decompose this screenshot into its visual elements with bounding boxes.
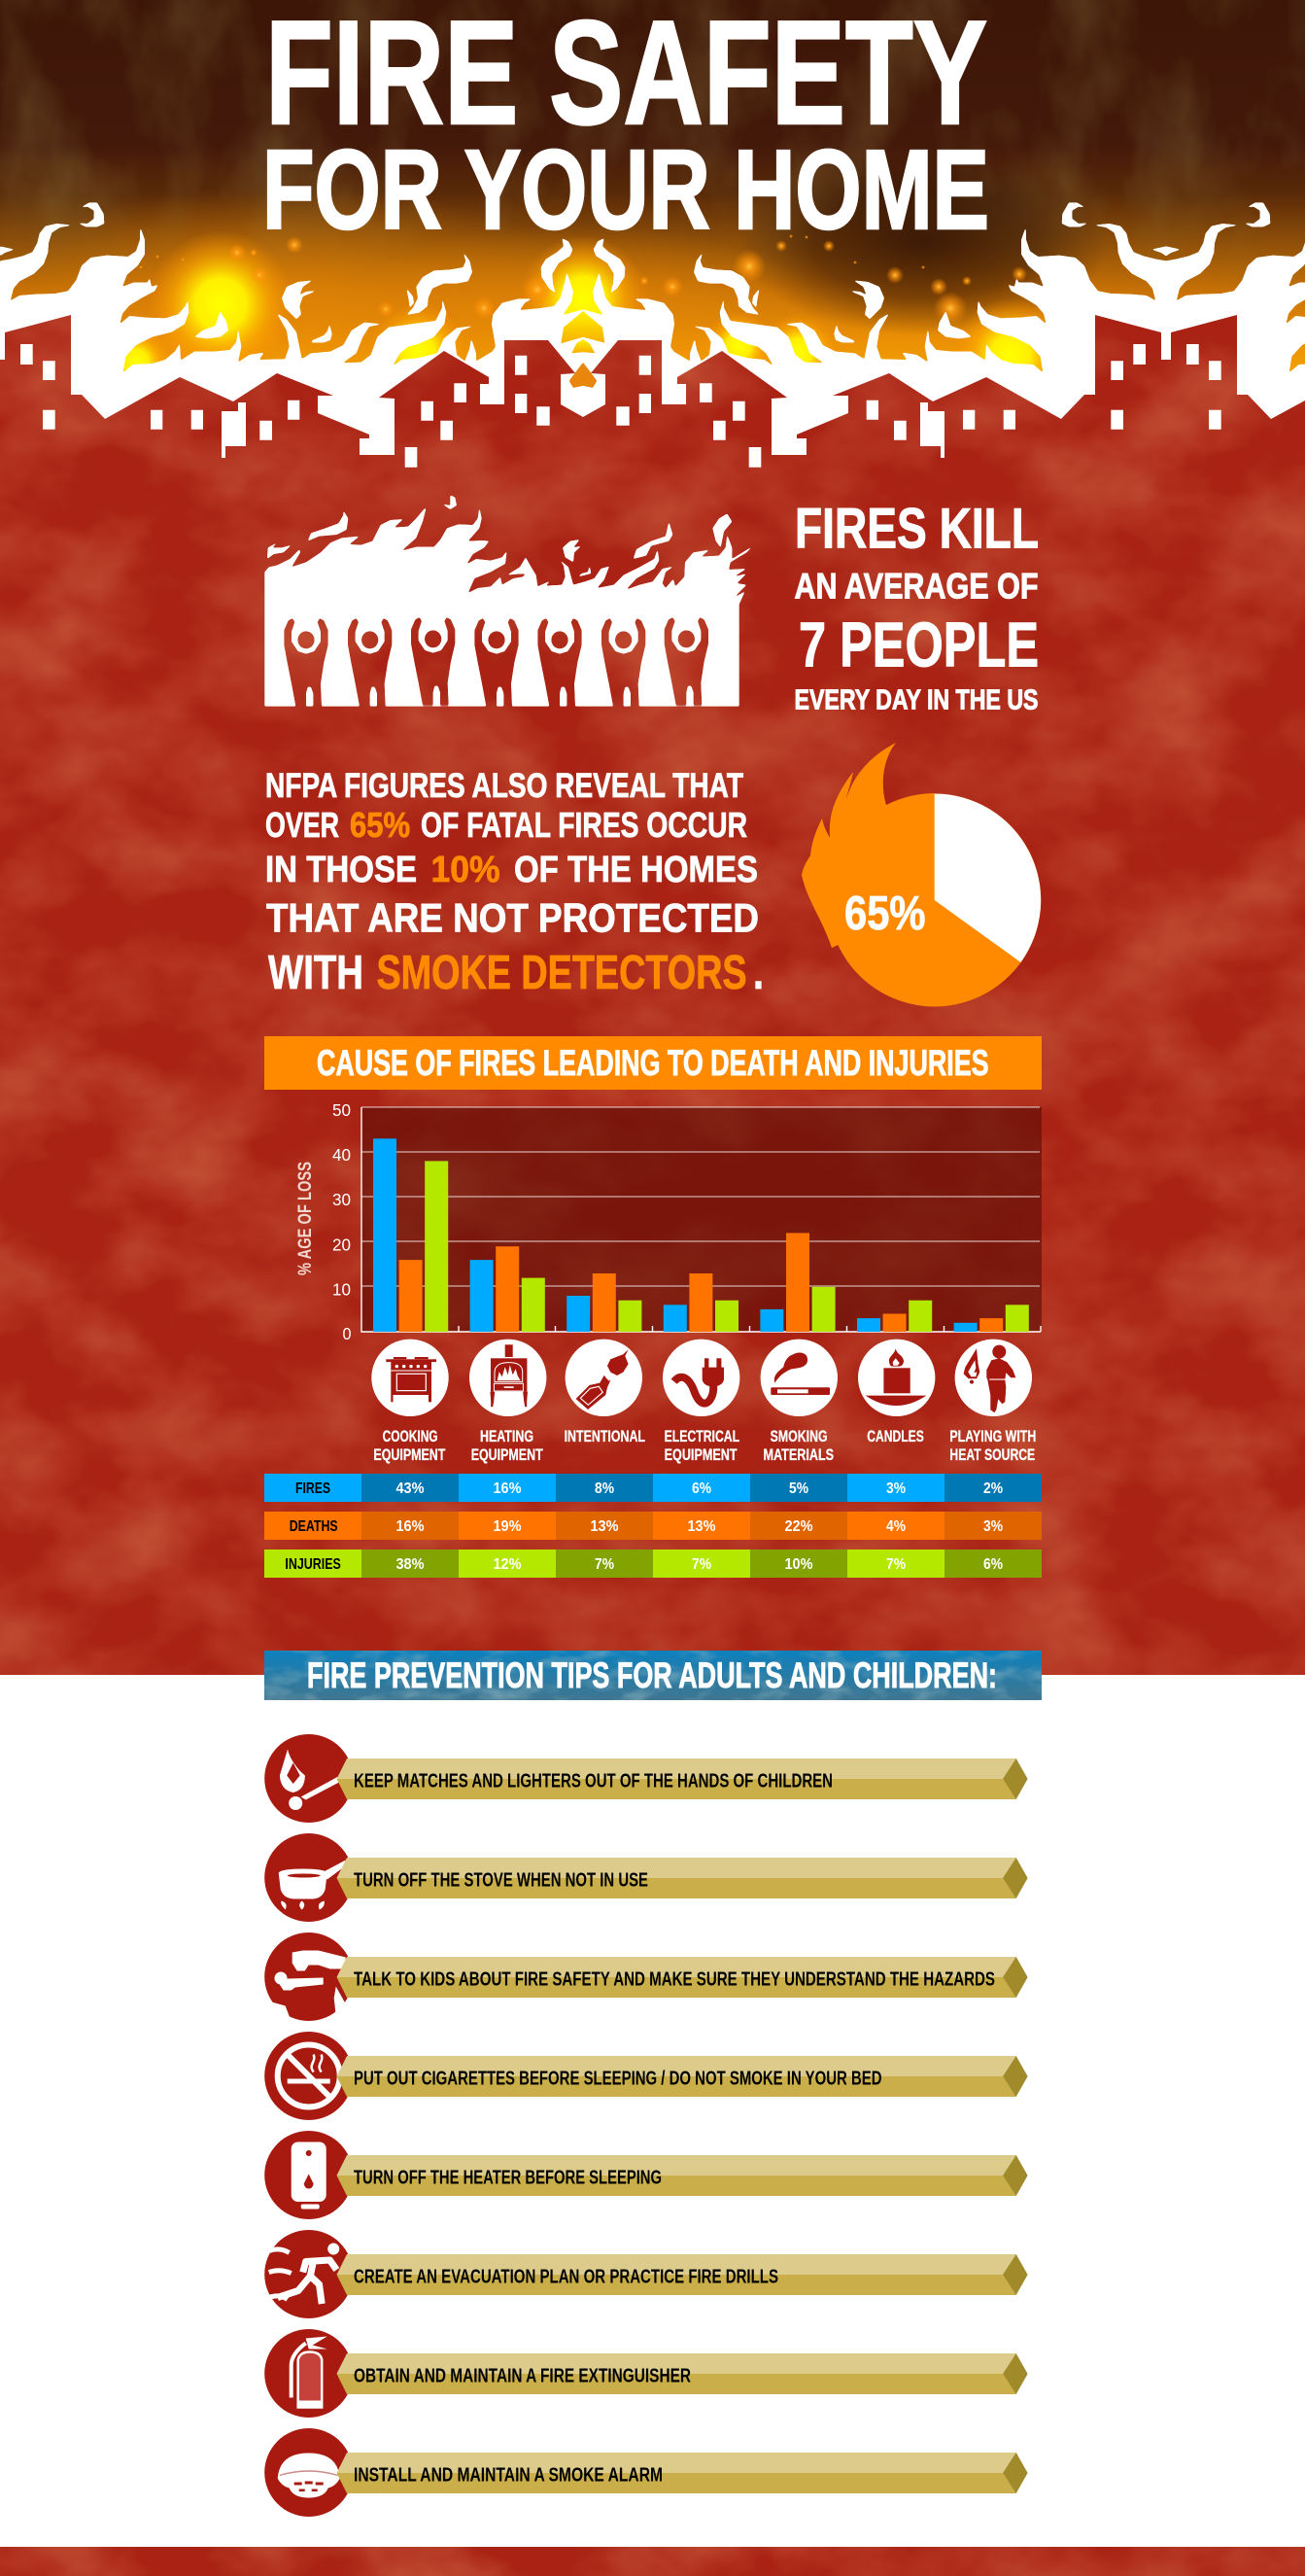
tip 3: talk to kids — [264, 1932, 1028, 2022]
table row: deaths: 19% — [494, 1518, 521, 1535]
table row: deaths: 22% — [785, 1518, 812, 1535]
icon: no smoking — [278, 2045, 340, 2107]
cause labels: EQUIPMENT — [373, 1445, 446, 1464]
icon: candle — [858, 1340, 935, 1416]
heading: cause of fires — [264, 1036, 1042, 1090]
table row: fires: 16% — [494, 1480, 521, 1497]
heading: cause of fires: CAUSE OF FIRES LEADING TO DEATH AND INJURIES — [317, 1043, 989, 1083]
icon: match and flame — [280, 1750, 343, 1810]
chart: 65 percent flame pie — [802, 743, 1041, 1007]
icon: pot on burner — [279, 1861, 346, 1909]
tip 1: matches — [264, 1734, 1028, 1823]
table row: fires: 6% — [692, 1480, 711, 1497]
tip 8: smoke alarm — [264, 2428, 1028, 2517]
bottom band — [0, 2547, 1305, 2576]
text block: NFPA smoke detector statement: OF FATAL FIRES OCCUR — [421, 805, 747, 845]
textured red background with house skyline — [0, 315, 1305, 1675]
cause labels: ELECTRICAL — [665, 1427, 739, 1445]
tip 2: stove — [264, 1833, 1028, 1922]
cause labels: PLAYING WITH — [949, 1427, 1036, 1445]
stat: fires kill 7 people: EVERY DAY IN THE US — [795, 684, 1038, 715]
tip 5: heater: TURN OFF THE HEATER BEFORE SLEEPING — [354, 2167, 662, 2188]
heading: fire prevention tips: FIRE PREVENTION TIPS FOR ADULTS AND CHILDREN: — [307, 1655, 997, 1695]
tip 5: heater — [264, 2131, 1028, 2219]
table row: injuries: 7% — [886, 1556, 906, 1573]
text block: NFPA smoke detector statement — [265, 767, 764, 999]
white flames silhouette — [0, 202, 1305, 486]
icon: electrical plug — [663, 1340, 739, 1416]
bar chart: percentage of loss by cause: 20 — [332, 1236, 351, 1255]
table row: injuries: 12% — [494, 1556, 521, 1573]
text block: NFPA smoke detector statement: 10% — [431, 850, 499, 890]
bar chart: percentage of loss by cause — [295, 1100, 1042, 1343]
tip 1: matches: KEEP MATCHES AND LIGHTERS OUT OF THE HANDS OF CHILDREN — [354, 1770, 833, 1792]
cause labels: SMOKING — [771, 1427, 828, 1445]
text block: NFPA smoke detector statement: . — [753, 947, 764, 999]
title — [262, 0, 989, 253]
icon: child playing with fire — [955, 1340, 1032, 1416]
table row: deaths: DEATHS — [290, 1518, 338, 1535]
stat: fires kill 7 people: AN AVERAGE OF — [795, 566, 1038, 607]
table row: fires: 43% — [396, 1480, 424, 1497]
house windows — [20, 344, 1305, 468]
table row: injuries — [264, 1549, 1042, 1578]
bar chart: percentage of loss by cause: 30 — [332, 1190, 351, 1209]
text block: NFPA smoke detector statement: NFPA FIGURES ALSO REVEAL THAT — [265, 767, 743, 805]
table row: deaths: 13% — [688, 1518, 715, 1535]
table row: injuries: 7% — [595, 1556, 614, 1573]
table row: injuries: 7% — [692, 1556, 711, 1573]
flame core shields — [561, 311, 604, 353]
icon: water heater — [292, 2142, 326, 2209]
text block: NFPA smoke detector statement: IN THOSE — [265, 850, 417, 890]
table row: fires: 5% — [789, 1480, 808, 1497]
tip 3: talk to kids: TALK TO KIDS ABOUT FIRE SAFETY AND MAKE SURE THEY UNDERSTAND THE HAZARDS — [354, 1968, 995, 1990]
table row: deaths — [264, 1512, 1042, 1540]
text block: NFPA smoke detector statement: OVER — [265, 805, 339, 845]
table row: injuries: INJURIES — [285, 1556, 341, 1573]
bar chart: percentage of loss by cause: 50 — [332, 1100, 351, 1120]
icon: smoking materials — [761, 1340, 838, 1416]
table row: fires — [264, 1474, 1042, 1502]
cause labels: COOKING — [383, 1427, 438, 1445]
heading: fire prevention tips — [264, 1651, 1042, 1700]
title: FOR YOUR HOME — [262, 126, 989, 253]
text block: NFPA smoke detector statement: 65% — [350, 805, 410, 845]
cause labels: HEATING — [480, 1427, 533, 1445]
stat: fires kill 7 people: FIRES KILL — [795, 498, 1039, 560]
cause labels: CANDLES — [867, 1427, 924, 1445]
text block: NFPA smoke detector statement: WITH — [268, 947, 363, 999]
chart: 65 percent flame pie: 65% — [844, 888, 925, 940]
table row: injuries: 38% — [396, 1556, 424, 1573]
icon: running figure — [269, 2244, 339, 2304]
cause labels: MATERIALS — [764, 1445, 834, 1464]
stat: fires kill 7 people — [795, 498, 1039, 715]
table row: fires: 2% — [983, 1480, 1003, 1497]
table row: deaths: 13% — [591, 1518, 618, 1535]
table row: deaths: 3% — [983, 1518, 1003, 1535]
table row: fires: 8% — [595, 1480, 614, 1497]
orange trefoil flame — [569, 363, 597, 388]
cause labels: EQUIPMENT — [665, 1445, 738, 1464]
fire backdrop — [0, 0, 1305, 371]
icon: intentional fire bottle — [566, 1340, 642, 1416]
cause labels: HEAT SOURCE — [949, 1445, 1035, 1464]
icon: smoke alarm — [278, 2454, 340, 2498]
tip 4: cigarettes: PUT OUT CIGARETTES BEFORE SLEEPING / DO NOT SMOKE IN YOUR BED — [354, 2068, 882, 2089]
text block: NFPA smoke detector statement: OF THE HOMES — [514, 850, 758, 890]
table row: deaths: 16% — [396, 1518, 424, 1535]
icon: heating equipment stove — [469, 1340, 546, 1416]
white tips panel — [0, 1675, 1305, 2547]
tip 2: stove: TURN OFF THE STOVE WHEN NOT IN USE — [354, 1869, 648, 1891]
cause icons row — [371, 1340, 1032, 1416]
icon: fire extinguisher — [292, 2337, 327, 2407]
tip 4: cigarettes — [264, 2032, 1028, 2120]
table row: injuries: 6% — [983, 1556, 1003, 1573]
tip 6: evacuation plan — [264, 2230, 1028, 2318]
text block: NFPA smoke detector statement: SMOKE DETECTORS — [377, 947, 746, 999]
tip 8: smoke alarm: INSTALL AND MAINTAIN A SMOKE ALARM — [354, 2464, 663, 2486]
bar chart: percentage of loss by cause: % AGE OF LOSS — [295, 1162, 316, 1275]
cause labels: INTENTIONAL — [565, 1427, 645, 1445]
cause labels — [373, 1427, 1036, 1464]
table row: deaths: 4% — [886, 1518, 906, 1535]
cause labels: EQUIPMENT — [471, 1445, 543, 1464]
table row: injuries: 10% — [785, 1556, 812, 1573]
text block: NFPA smoke detector statement: THAT ARE NOT PROTECTED — [266, 895, 759, 941]
table row: fires: 3% — [886, 1480, 906, 1497]
tip 6: evacuation plan: CREATE AN EVACUATION PLAN OR PRACTICE FIRE DRILLS — [354, 2266, 778, 2287]
bar chart: percentage of loss by cause: 10 — [332, 1280, 351, 1300]
icon: cooking equipment — [371, 1340, 449, 1416]
table row: fires: FIRES — [295, 1480, 330, 1497]
tip 7: extinguisher — [264, 2329, 1028, 2418]
stat: fires kill 7 people: 7 PEOPLE — [799, 609, 1039, 680]
icon: people in burning building — [264, 495, 753, 707]
bar chart: percentage of loss by cause: 0 — [342, 1324, 352, 1343]
bar chart: percentage of loss by cause: 40 — [332, 1145, 351, 1165]
tip 7: extinguisher: OBTAIN AND MAINTAIN A FIRE EXTINGUISHER — [354, 2365, 691, 2386]
icon: adult and child — [272, 1950, 346, 2022]
